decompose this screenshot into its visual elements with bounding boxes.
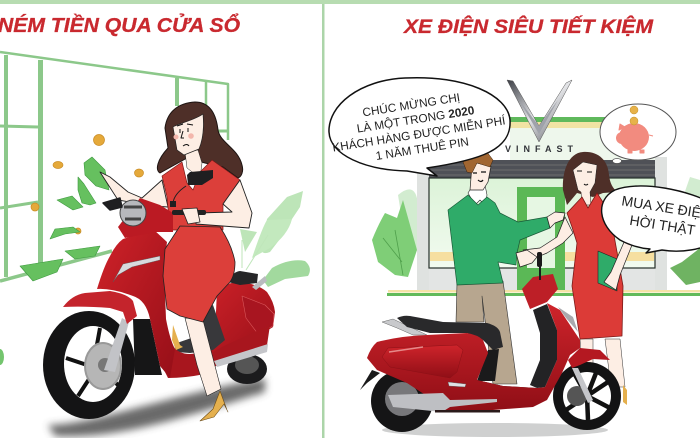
woman: left arm xyxy=(100,172,168,207)
rear wheel xyxy=(227,354,267,384)
man: neck and collar xyxy=(468,185,487,205)
woman: hair xyxy=(157,102,243,178)
panel: right, electric scooter saves money xyxy=(327,16,700,437)
under-seat black xyxy=(477,349,499,381)
silver badge xyxy=(558,307,578,332)
speech bubble: customer xyxy=(602,186,700,253)
speech text: congratulations: KHÁCH HÀNG ĐƯỢC MIỄN PHÍ xyxy=(331,113,507,155)
scooter shadow: left xyxy=(48,378,265,436)
seat xyxy=(228,271,258,285)
headset xyxy=(522,274,558,309)
plant: leaves behind scooter xyxy=(240,191,310,287)
flying banknotes xyxy=(20,157,109,281)
mirror and stalk xyxy=(537,252,542,280)
woman: face and neck xyxy=(573,162,597,205)
shop building xyxy=(417,117,667,291)
woman: red skirt xyxy=(163,226,235,322)
woman: red dress xyxy=(567,193,623,339)
man: upper hand xyxy=(547,212,565,228)
woman: legs xyxy=(580,339,625,387)
handshake xyxy=(516,250,537,267)
chrome strip xyxy=(113,256,160,282)
fork xyxy=(572,368,593,403)
leg shield xyxy=(97,229,175,378)
icon: piggy xyxy=(616,123,653,153)
left mirror xyxy=(103,198,122,210)
grab rail xyxy=(382,319,427,335)
speech text: customer: HỜI THẬT xyxy=(629,212,697,238)
man: green sweater xyxy=(448,195,550,285)
panel: left, throwing money out the window xyxy=(0,13,310,436)
scooter: right, side view xyxy=(360,252,621,432)
seat xyxy=(397,316,503,350)
grab rail xyxy=(252,276,267,290)
rear body xyxy=(200,282,275,364)
muffler xyxy=(388,393,497,412)
speech text: congratulations: CHÚC MỪNG CHỊ xyxy=(361,90,461,119)
dark underbody xyxy=(133,319,162,375)
underbody line xyxy=(435,410,500,412)
tail xyxy=(360,370,380,390)
woman: arm to handshake xyxy=(523,217,573,258)
panel highlight xyxy=(389,347,423,352)
edge leaf at left border xyxy=(0,349,4,365)
woman with folder xyxy=(523,152,634,405)
speech text: congratulations: LÀ MỘT TRONG 2020 xyxy=(356,103,475,136)
red scooter head xyxy=(118,198,173,238)
front fender xyxy=(568,348,610,368)
woman: arm on hip xyxy=(604,233,634,290)
black column xyxy=(530,304,557,388)
right mirror xyxy=(170,170,213,207)
icon: coins xyxy=(630,106,638,125)
coins xyxy=(31,134,144,234)
top border xyxy=(0,0,700,4)
man: face xyxy=(470,163,491,190)
floor black xyxy=(477,380,545,393)
silver trim xyxy=(214,344,268,367)
rear wheel xyxy=(371,370,433,432)
scooter: left, front three-quarter view xyxy=(43,170,275,419)
scooter shadow: right xyxy=(382,423,608,437)
red body xyxy=(367,303,580,412)
man: trousers xyxy=(456,281,517,384)
woman: neck xyxy=(185,150,202,178)
man xyxy=(448,152,565,384)
rear panel line xyxy=(242,296,274,334)
front wheel xyxy=(553,362,621,430)
handlebar and hand xyxy=(172,208,206,224)
woman: rear foot shoe xyxy=(172,325,183,350)
front wheel xyxy=(43,311,135,419)
ground line xyxy=(387,290,700,296)
woman: right arm xyxy=(196,180,252,228)
man: hair xyxy=(463,152,493,173)
lower red shell xyxy=(160,325,270,378)
front fender xyxy=(63,291,137,324)
panel divider xyxy=(322,4,324,438)
thought bubble: piggy bank xyxy=(600,104,676,164)
heading: left: NÉM TIỀN QUA CỬA SỔ xyxy=(0,13,240,37)
VinFast logo xyxy=(505,80,574,154)
side panel xyxy=(382,345,463,378)
headlight xyxy=(120,200,146,226)
woman: folder xyxy=(598,251,617,291)
front fork xyxy=(104,318,129,372)
speech text: congratulations: 1 NĂM THUÊ PIN xyxy=(375,134,470,163)
speech bubble: staff xyxy=(327,78,510,176)
woman: heel xyxy=(623,385,627,405)
woman: face xyxy=(173,114,204,155)
floor xyxy=(174,305,225,353)
pillion step xyxy=(448,382,466,387)
heading: right: XE ĐIỆN SIÊU TIẾT KIỆM xyxy=(403,16,654,38)
VinFast wordmark: VINFAST xyxy=(505,144,574,154)
woman: hair xyxy=(563,152,617,205)
woman: yellow heel xyxy=(200,391,228,421)
plants beside shop xyxy=(372,177,700,285)
window frame xyxy=(0,52,228,281)
woman: red dress top xyxy=(162,160,240,230)
woman: leg xyxy=(185,318,221,396)
